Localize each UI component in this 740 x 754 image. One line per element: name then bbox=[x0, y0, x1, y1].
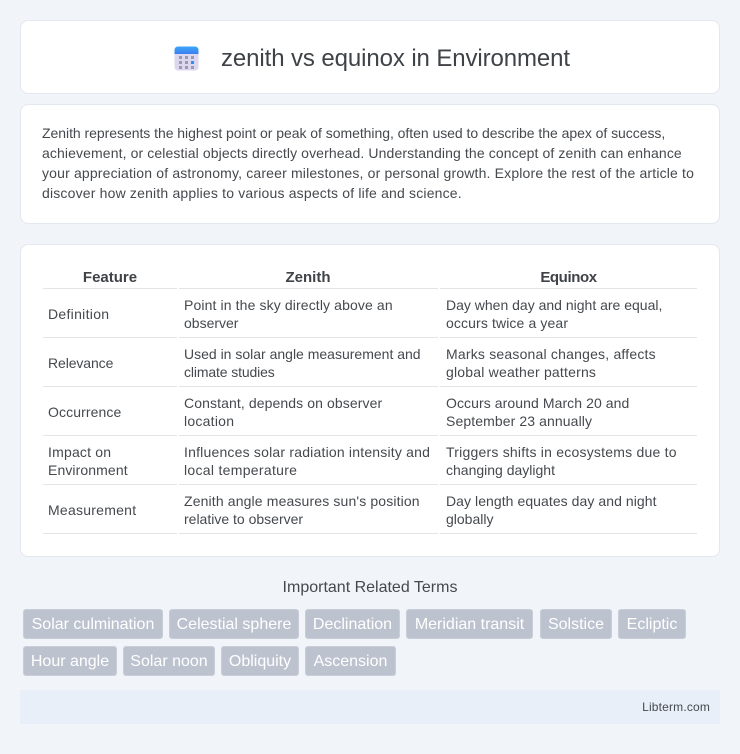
row: Impact on Environment bbox=[48, 444, 128, 478]
Equinox definition: occurs twice a year bbox=[446, 315, 568, 331]
intro text: your appreciation of astronomy, career milestones, or personal growth. Explore the rest of the article to bbox=[42, 165, 694, 181]
icon: calendar bbox=[174, 46, 198, 70]
tag: Declination bbox=[313, 616, 392, 633]
intro text: Zenith represents the highest point or peak of something, often used to describe the apex of success, bbox=[42, 125, 665, 141]
Zenith measurement: Zenith angle measures sun's position bbox=[184, 493, 420, 509]
Zenith relevance: Used in solar angle measurement and bbox=[184, 346, 421, 362]
tag: Celestial sphere bbox=[177, 616, 291, 633]
intro text: discover how zenith applies to various aspects of life and science. bbox=[42, 185, 462, 201]
Equinox definition bbox=[446, 297, 662, 331]
Zenith occurrence bbox=[184, 395, 382, 429]
row: Measurement: Measurement bbox=[48, 502, 136, 518]
header panel bbox=[20, 20, 720, 94]
tag bbox=[23, 646, 117, 676]
Zenith impact bbox=[184, 444, 430, 478]
tag bbox=[169, 609, 299, 639]
row: Impact on Environment: Impact on bbox=[48, 444, 111, 460]
Zenith relevance: climate studies bbox=[184, 364, 275, 380]
Zenith impact: Influences solar radiation intensity and bbox=[184, 444, 430, 460]
Equinox impact: Triggers shifts in ecosystems due to bbox=[446, 444, 677, 460]
tag bbox=[618, 609, 686, 639]
tag: Obliquity bbox=[229, 653, 291, 670]
tag bbox=[221, 646, 299, 676]
title: zenith vs equinox in Environment bbox=[221, 45, 570, 72]
row: Relevance: Relevance bbox=[48, 355, 113, 371]
related terms heading: Important Related Terms bbox=[283, 579, 457, 596]
Equinox relevance: global weather patterns bbox=[446, 364, 596, 380]
Equinox measurement: globally bbox=[446, 511, 493, 527]
intro panel bbox=[20, 104, 720, 224]
Zenith impact: local temperature bbox=[184, 462, 297, 478]
Zenith definition: Point in the sky directly above an bbox=[184, 297, 393, 313]
Equinox relevance: Marks seasonal changes, affects bbox=[446, 346, 656, 362]
intro text bbox=[42, 125, 694, 201]
tag bbox=[123, 646, 215, 676]
related term tags bbox=[23, 609, 686, 676]
Equinox measurement: Day length equates day and night bbox=[446, 493, 657, 509]
tag bbox=[540, 609, 612, 639]
Equinox relevance bbox=[446, 346, 656, 380]
row: Impact on Environment: Environment bbox=[48, 462, 128, 478]
footer bar bbox=[20, 690, 720, 724]
tag: Solstice bbox=[548, 616, 604, 633]
header: Equinox: Equinox bbox=[540, 269, 597, 286]
Zenith definition bbox=[184, 297, 393, 331]
Zenith definition: observer bbox=[184, 315, 238, 331]
Equinox impact: changing daylight bbox=[446, 462, 555, 478]
Equinox definition: Day when day and night are equal, bbox=[446, 297, 662, 313]
tag: Ascension bbox=[314, 653, 387, 670]
tag bbox=[305, 646, 396, 676]
tag: Ecliptic bbox=[627, 616, 677, 633]
Equinox occurrence bbox=[446, 395, 629, 429]
tag: Hour angle bbox=[31, 653, 109, 670]
footer credit: Libterm.com bbox=[642, 700, 710, 714]
tag bbox=[406, 609, 533, 639]
tag: Solar noon bbox=[130, 653, 208, 670]
Zenith relevance bbox=[184, 346, 421, 380]
Equinox impact bbox=[446, 444, 677, 478]
Equinox measurement bbox=[446, 493, 657, 527]
Zenith measurement bbox=[184, 493, 420, 527]
Zenith occurrence: location bbox=[184, 413, 234, 429]
comparison table panel bbox=[20, 244, 720, 557]
Zenith occurrence: Constant, depends on observer bbox=[184, 395, 382, 411]
Equinox occurrence: September 23 annually bbox=[446, 413, 592, 429]
tag bbox=[23, 609, 163, 639]
intro text: achievement, or celestial objects directly overhead. Understanding the concept of zenith can enhance bbox=[42, 145, 682, 161]
tag: Meridian transit bbox=[415, 616, 524, 633]
tag: Solar culmination bbox=[32, 616, 154, 633]
row: Occurrence: Occurrence bbox=[48, 404, 121, 420]
row: Definition: Definition bbox=[48, 306, 109, 322]
header: Zenith: Zenith bbox=[286, 269, 330, 286]
tag bbox=[305, 609, 400, 639]
Equinox occurrence: Occurs around March 20 and bbox=[446, 395, 629, 411]
header: Feature: Feature bbox=[83, 269, 137, 286]
Zenith measurement: relative to observer bbox=[184, 511, 303, 527]
